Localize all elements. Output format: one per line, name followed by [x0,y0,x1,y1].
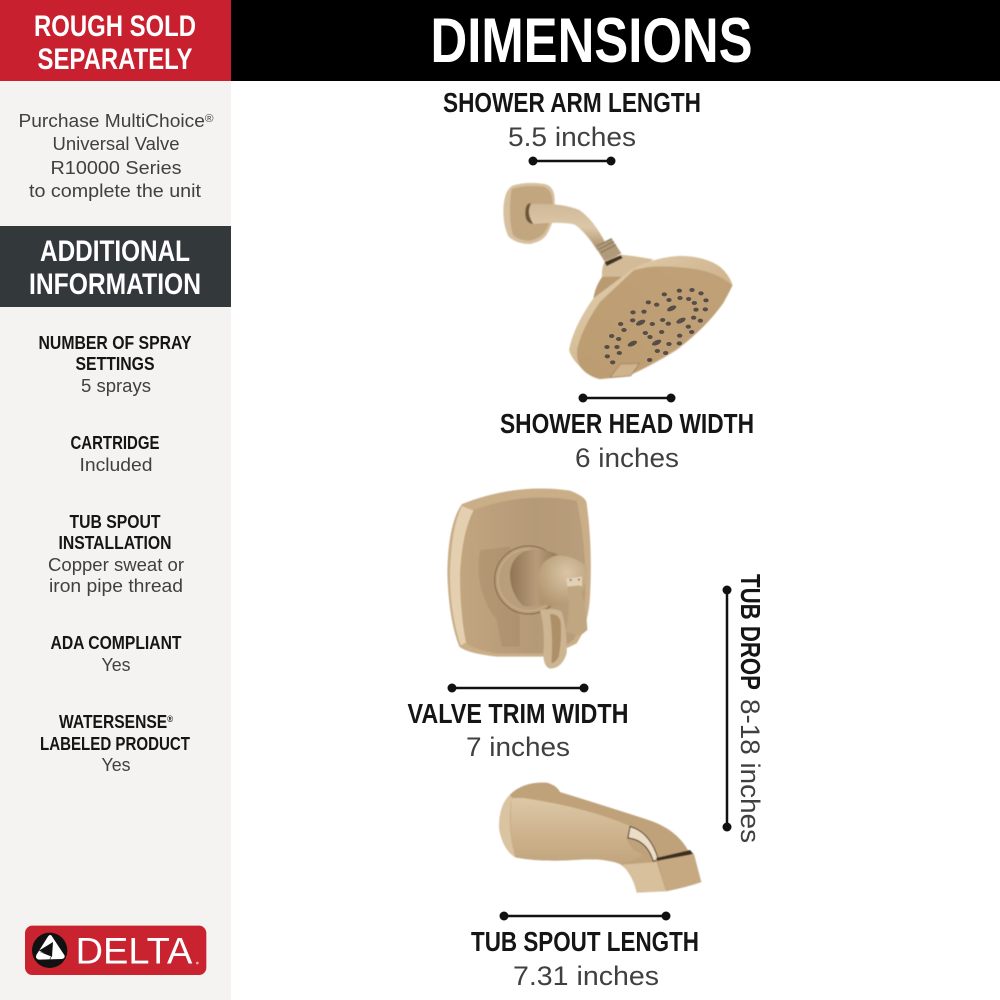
label: tub drop: TUB DROP [735,574,766,690]
dimension line: tub spout [500,912,670,920]
text block: tub spout installation: iron pipe thread [49,576,183,596]
label: tub drop: 8-18 inches [735,699,765,843]
label: tub spout length: TUB SPOUT LENGTH [471,926,699,957]
icon: valve trim [447,488,591,669]
icon: shower head and arm [503,183,733,379]
title: dimensions banner [231,0,1000,81]
panel: rough sold separately banner [0,0,231,81]
text block: tub spout installation: TUB SPOUT [70,512,160,532]
dimension line: tub drop [722,586,732,832]
text block: cartridge: Included [80,455,152,475]
label: valve trim width: VALVE TRIM WIDTH [408,698,628,729]
icon: shower head spray holes [604,288,709,364]
text block: purchase note: R10000 Series [50,158,182,178]
sidebar background [0,0,231,1000]
label: shower head width: 6 inches [575,443,679,473]
panel: rough sold separately banner: ROUGH SOLD [34,10,196,43]
panel: rough sold separately banner: SEPARATELY [38,43,192,76]
text block: purchase note: Purchase MultiChoice [18,111,194,131]
text block: watersense labeled product: WATERSENSE [59,712,184,732]
text block: tub spout installation: Copper sweat or [48,555,184,575]
logo: delta [25,926,206,975]
text block: ada compliant: ADA COMPLIANT [50,633,182,653]
label: valve trim width [408,698,628,762]
logo: delta: DELTA [76,930,192,972]
title: dimensions banner: DIMENSIONS [430,6,752,76]
text block: number of spray settings [38,333,192,396]
heading: additional information [0,226,231,307]
text block: tub spout installation: INSTALLATION [58,533,172,553]
dimension line: shower arm [528,156,616,166]
text block: number of spray settings: 5 sprays [81,376,151,396]
label: tub drop [735,574,766,843]
text block: cartridge [70,433,160,475]
text block: watersense labeled product [40,712,190,775]
heading: additional information: ADDITIONAL [40,235,190,268]
text block: ada compliant [50,633,182,675]
text block: cartridge: CARTRIDGE [70,433,160,453]
text block: purchase note: to complete the unit [29,181,201,201]
heading: additional information: INFORMATION [29,268,201,301]
text block: purchase note: Universal Valve [52,134,180,154]
text block: watersense labeled product: Yes [102,755,130,775]
text block: watersense labeled product: ® [167,714,173,724]
label: shower head width [500,408,754,473]
label: shower arm length: SHOWER ARM LENGTH [443,87,701,118]
icon: tub spout [499,783,701,893]
label: shower head width: SHOWER HEAD WIDTH [500,408,754,439]
dimension line: shower head [578,394,676,402]
text block: ada compliant: Yes [102,655,130,675]
label: tub spout length: 7.31 inches [513,961,659,991]
text block: watersense labeled product: LABELED PRODUCT [40,734,190,754]
dimension line: valve trim [448,684,588,692]
text block: number of spray settings: NUMBER OF SPRAY [38,333,192,353]
label: shower arm length: 5.5 inches [508,122,636,152]
text block: tub spout installation [48,512,184,596]
text block: number of spray settings: SETTINGS [76,354,154,374]
text block: purchase note: ® [205,113,214,125]
text block: purchase note [18,111,214,201]
label: tub spout length [471,926,699,991]
label: valve trim width: 7 inches [466,732,570,762]
label: shower arm length [443,87,701,152]
